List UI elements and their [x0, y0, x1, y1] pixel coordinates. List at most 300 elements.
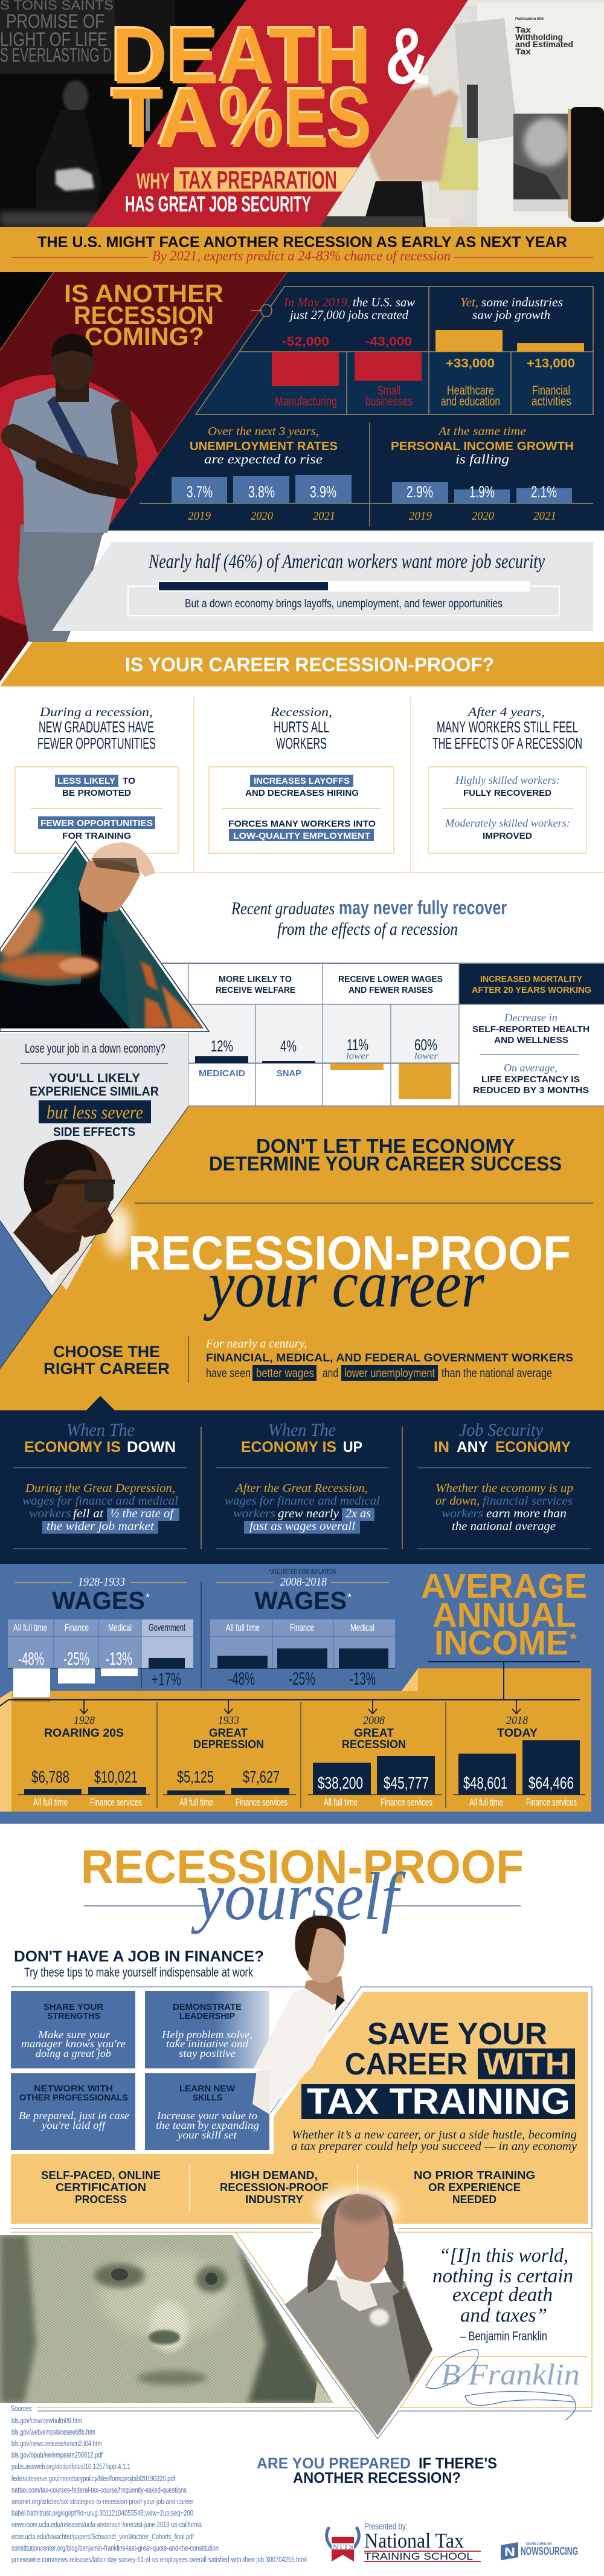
card: demonstrate leadership: DEMONSTRATE: [173, 2002, 242, 2012]
photo: young man in white shirt: [252, 1916, 349, 2115]
benefit: self-paced: [41, 2169, 161, 2206]
column: hurts all workers: [209, 705, 394, 853]
mortality cell: [472, 1012, 590, 1096]
column: when the economy is up: grew nearly: [278, 1507, 339, 1520]
chart: wages 1928-1933: -13%: [106, 1649, 132, 1669]
sources list: constitutioncenter.org/blog/benjamin-franklins-last-great-quote-and-the-constitution: [11, 2543, 219, 2552]
document title on tax publication: Publication 505: [515, 18, 544, 21]
logo: NowSourcing: N: [504, 2546, 515, 2559]
subtitle: why tax preparation has great job security: TAX PREPARATION: [179, 166, 337, 194]
title: DEATH & TAXES: TA: [112, 72, 219, 165]
panel: jobs created in May 2019: [196, 286, 593, 415]
header cells: [216, 974, 591, 995]
column: roaring 20s: [18, 1714, 150, 1808]
hero: red diagonal band: [86, 0, 468, 227]
text: save your career with tax training: Whether it’s a new career, or just a side hustle, becoming: [292, 2128, 577, 2142]
column: new graduates: [15, 705, 178, 853]
column: hurts all workers: WORKERS: [276, 734, 327, 752]
bar chart: personal income growth: 2.1%: [531, 483, 557, 501]
chart: wages 1928-1933: *: [146, 1592, 150, 1604]
photo: engraving of Franklin on banknote: [0, 2235, 338, 2404]
column: great recession: [308, 1714, 442, 1808]
card: learn new skills: SKILLS: [193, 2093, 222, 2103]
column: new graduates: LESS LIKELY: [57, 776, 115, 786]
quote: Benjamin Franklin: [432, 2245, 573, 2343]
text: choose the right career: than the national average: [442, 1367, 552, 1380]
mortality cell: Decrease in: [504, 1012, 557, 1024]
header cells: INCREASED MORTALITY: [480, 974, 582, 984]
logo: National Tax Training School: TRAINING SCHOOL: [364, 2551, 473, 2562]
title: DEATH & TAXES: &: [385, 11, 429, 100]
column: great recession: RECESSION: [342, 1738, 406, 1751]
column: today: [453, 1714, 585, 1808]
heading: is another recession coming: COMING?: [85, 322, 204, 350]
text: job growth intro: Yet,: [460, 295, 478, 309]
bar chart: welfare and wages: lower: [346, 1051, 369, 1061]
text: job losses intro: In May 2019,: [283, 295, 350, 309]
heading: recession-proof yourself: RECESSION-PROOF: [81, 1840, 524, 1893]
column: great recession: $45,777: [384, 1774, 429, 1792]
mortality cell: On average,: [504, 1062, 557, 1074]
mortality cell: LIFE EXPECTANCY IS: [481, 1074, 580, 1085]
chart: wages 2008-2018: [210, 1575, 395, 1689]
column: job security in any economy: [434, 1420, 573, 1533]
closing question: [257, 2455, 497, 2487]
tips cards: [11, 1991, 269, 2150]
table: long-term effects: [162, 963, 604, 1106]
column: roaring 20s: All full time: [33, 1796, 68, 1808]
heading: recession-proof your career: your career: [203, 1247, 485, 1321]
text: choose the right career: lower unemployment: [344, 1367, 435, 1380]
chart: wages 1928-1933: 1928-1933: [78, 1575, 125, 1589]
column: when the economy is down: workers: [29, 1507, 71, 1520]
chart: wages 2008-2018: -25%: [289, 1669, 315, 1689]
chart: wages 2008-2018: All full time: [226, 1622, 260, 1633]
title: DEATH & TAXES: [112, 11, 429, 165]
column: after four years: FULLY RECOVERED: [463, 788, 551, 798]
document title on tax publication: [515, 18, 573, 56]
column: roaring 20s: Finance services: [90, 1796, 142, 1808]
text: unemployment heading: UNEMPLOYMENT RATES: [190, 440, 338, 453]
column: roaring 20s: $10,021: [94, 1767, 138, 1786]
heading: don't let the economy determine your career success: DON'T LET THE ECONOMY: [256, 1135, 515, 1157]
column: when the economy is down: When The: [66, 1420, 135, 1440]
header cells: MORE LIKELY TO: [219, 974, 292, 984]
chart: wages 2008-2018: Finance: [290, 1622, 314, 1633]
document title on tax publication: Withholding: [515, 32, 563, 42]
benefit: no prior training: [414, 2169, 535, 2206]
mortality cell: REDUCED BY 3 MONTHS: [473, 1085, 589, 1096]
column: when the economy is down: ECONOMY IS: [24, 1439, 121, 1456]
heading: is another recession coming: RECESSION: [74, 301, 214, 329]
sources list: bls.gov/web/empsit/ceseeb8b.htm: [11, 2427, 95, 2436]
column: when the economy is up: fast as wages overall: [249, 1520, 355, 1533]
heading band: is your career recession-proof: [0, 642, 604, 686]
sources list: nattax.com/tax-courses-federal-tax-course/frequently-asked-questions: [11, 2485, 187, 2494]
column: when the economy is down: [22, 1420, 179, 1534]
column: when the economy is down: ½ the rate of: [110, 1507, 175, 1520]
subtitle: why tax preparation has great job security: WHY: [137, 169, 170, 193]
column: job security in any economy: IN: [434, 1439, 449, 1456]
bar chart: welfare and wages: [195, 1036, 451, 1099]
text: choose the right career: FINANCIAL, MEDICAL, AND FEDERAL GOVERNMENT WORKERS: [206, 1352, 573, 1364]
text: income growth heading: PERSONAL INCOME GROWTH: [391, 440, 574, 453]
card: share your strengths: manager knows you're: [21, 2038, 126, 2050]
chart: wages 1928-1933: All full time: [13, 1622, 47, 1633]
bar chart: personal income growth: 2020: [472, 509, 494, 523]
panel: save your career background: [11, 1987, 592, 2229]
sources list: babel.hathitrust.org/cgi/pt?id=uiug.30112104053548;view=2up;seq=200: [11, 2508, 193, 2517]
text: income growth heading: At the same time: [437, 425, 526, 438]
section background: is another recession coming: [0, 272, 604, 682]
column: hurts all workers: LOW-QUALITY EMPLOYMENT: [233, 831, 370, 841]
bar chart: unemployment rates: [172, 475, 352, 523]
heading: recession-proof yourself: yourself: [191, 1859, 406, 1934]
card: share your strengths: STRENGTHS: [47, 2011, 100, 2021]
card: learn new skills: [145, 2073, 269, 2150]
chart: wages 1928-1933: [8, 1575, 193, 1690]
bar chart: welfare and wages: SNAP: [277, 1068, 301, 1079]
column: today: All full time: [469, 1796, 503, 1808]
column: hurts all workers: HURTS ALL: [274, 718, 329, 736]
bar chart: welfare and wages: MEDICAID: [199, 1068, 245, 1079]
chart: wages 1928-1933: -25%: [63, 1649, 89, 1669]
sources list: newsroom.ucla.edu/releases/ucla-anderson-forecast-june-2019-us-california: [11, 2520, 202, 2529]
heading: is another recession coming: IS ANOTHER: [64, 279, 223, 308]
heading: is another recession coming: [64, 279, 223, 350]
card: learn new skills: the team by expanding: [156, 2119, 259, 2131]
text: save your career with tax training: [291, 2016, 577, 2153]
column: job security in any economy: earn more than: [486, 1507, 567, 1520]
column: roaring 20s: 1928: [74, 1714, 95, 1727]
bar chart: jobs by industry: activities: [532, 395, 571, 408]
text: save your career with tax training: CAREER: [345, 2047, 467, 2081]
card: network with other professionals: OTHER PROFESSIONALS: [19, 2093, 128, 2103]
column: when the economy is down: the wider job market: [47, 1520, 154, 1533]
benefit: self-paced: CERTIFICATION: [56, 2181, 146, 2193]
column: when the economy is up: [225, 1420, 380, 1534]
text: choose the right career: better wages: [256, 1367, 314, 1380]
text: don't have a job in finance: Try these tips to make yourself indispensable at work: [24, 1966, 253, 1980]
bar chart: personal income growth: 1.9%: [469, 483, 495, 501]
timeline arrows: [80, 1700, 521, 1714]
text: save your career with tax training: SAVE YOUR: [367, 2016, 547, 2051]
text: save your career with tax training: a tax preparer could help you succeed — in any economy: [291, 2140, 577, 2153]
bar chart: jobs by industry: +33,000: [446, 357, 495, 370]
card: share your strengths: SHARE YOUR: [43, 2002, 103, 2012]
benefit: self-paced: SELF-PACED, ONLINE: [41, 2169, 161, 2181]
text: choose the right career: [43, 1336, 573, 1383]
sources list: bls.gov/news.release/union2.t04.htm: [11, 2439, 102, 2448]
bar chart: unemployment rates: 3.7%: [187, 483, 213, 501]
heading: recession-proof yourself: [81, 1840, 524, 1934]
benefits row: [41, 2165, 535, 2213]
panel: lose your job in a down economy: YOU'LL LIKELY: [49, 1071, 140, 1085]
panel: average income timeline: [0, 1662, 591, 1812]
hero: right photograph of tax documents: [302, 0, 604, 227]
card: demonstrate leadership: Help problem solve,: [161, 2029, 252, 2041]
column: new graduates: BE PROMOTED: [62, 788, 131, 798]
header cells: AFTER 20 YEARS WORKING: [472, 985, 591, 995]
icon: NTTS laurel and flag: NTTS: [332, 2544, 353, 2551]
benefit: self-paced: PROCESS: [75, 2193, 127, 2206]
text: choose the right career: and: [323, 1367, 338, 1380]
card: network with other professionals: you're laid off: [40, 2119, 107, 2131]
text: recent graduates may never fully recover: from the effects of a recession: [277, 919, 458, 939]
card: share your strengths: Make sure your: [37, 2029, 111, 2041]
column: after four years: Moderately skilled workers:: [445, 817, 570, 829]
column: today: $48,601: [463, 1774, 507, 1792]
column: after four years: After 4 years,: [467, 705, 545, 719]
photo: young man in cap inside triangle: [0, 840, 209, 1033]
benefit: high demand: HIGH DEMAND,: [230, 2169, 318, 2181]
sources list: amanet.org/articles/six-strategies-to-recession-proof-your-job-and-career: [11, 2497, 193, 2506]
bar chart: jobs by industry: +13,000: [527, 357, 575, 370]
logo: National Tax Training School: [327, 2522, 481, 2562]
bar chart: personal income growth: 2021: [533, 509, 556, 523]
column: job security in any economy: Whether the economy is up: [435, 1482, 573, 1495]
mortality cell: AND WELLNESS: [494, 1035, 568, 1045]
column: great recession: $38,200: [318, 1774, 363, 1792]
column: great depression: GREAT: [209, 1727, 248, 1740]
benefit: no prior training: NO PRIOR TRAINING: [414, 2169, 535, 2181]
chart: wages 1928-1933: -48%: [18, 1649, 44, 1669]
chart: wages 2008-2018: -48%: [228, 1669, 255, 1689]
heading: don't let the economy determine your career success: [209, 1135, 562, 1175]
heading: recession-proof your career: RECESSION-PROOF: [128, 1226, 571, 1280]
title: DEATH & TAXES: DEATH: [112, 11, 371, 100]
bar chart: jobs by industry: Small: [378, 384, 400, 398]
card: share your strengths: [11, 1991, 135, 2068]
chart: wages 2008-2018: WAGES: [254, 1586, 347, 1615]
logo: National Tax Training School: Presented by:: [364, 2522, 408, 2532]
panel: lose your job in a down economy: Lose your job in a down economy?: [25, 1042, 165, 1056]
column: today: Finance services: [526, 1796, 577, 1808]
mortality cell: SELF-REPORTED HEALTH: [472, 1024, 590, 1035]
column: new graduates: During a recession,: [39, 705, 153, 719]
chart: wages 1928-1933: WAGES: [52, 1586, 145, 1615]
heading: average annual income: [421, 1567, 587, 1662]
card: demonstrate leadership: LEADERSHIP: [179, 2011, 235, 2021]
panel: navy economy comparison: [0, 1396, 604, 1564]
column: when the economy is down: During the Great Depression,: [25, 1482, 175, 1495]
subtitle: why tax preparation has great job security: HAS GREAT JOB SECURITY: [125, 192, 311, 216]
icon: NTTS laurel and flag: [327, 2527, 359, 2561]
column: when the economy is up: wages for finance and medical: [225, 1494, 380, 1508]
text: unemployment heading: Over the next 3 years,: [208, 425, 319, 438]
panel: job security statistic: [52, 542, 593, 631]
column: job security in any economy: Job Security: [459, 1420, 544, 1440]
bar chart: jobs by industry: businesses: [365, 395, 413, 408]
quote: Benjamin Franklin: “[I]n this world,: [439, 2245, 568, 2267]
column: job security in any economy: workers: [442, 1507, 483, 1520]
bar chart: jobs by industry: -52,000: [282, 335, 329, 349]
card: network with other professionals: [11, 2073, 135, 2150]
column: job security in any economy: financial services: [483, 1494, 573, 1508]
band: recession forecast: By 2021, experts predict a 24-83% chance of recession: [152, 248, 451, 263]
column: new graduates: TO: [123, 776, 135, 786]
chart: wages 1928-1933: +17%: [152, 1670, 181, 1690]
text: don't have a job in finance: [14, 1948, 264, 1980]
text: choose the right career: have seen: [206, 1367, 251, 1380]
closing question: ANOTHER RECESSION?: [293, 2470, 461, 2487]
bar chart: welfare and wages: 11%: [347, 1036, 368, 1054]
panel: blue wages and income section: *ADJUSTED FOR INFLATION: [269, 1567, 336, 1576]
quote: Benjamin Franklin: and taxes”: [460, 2305, 547, 2326]
column: great recession: GREAT: [354, 1727, 394, 1740]
card: learn new skills: LEARN NEW: [179, 2084, 236, 2094]
column: great depression: $7,627: [243, 1767, 280, 1786]
sources list: prnewswire.com/news-releases/labor-day-survey-51-of-us-employees-overall-satisfied-with-their-job-300704255.html: [11, 2555, 307, 2564]
quote: Benjamin Franklin: – Benjamin Franklin: [460, 2329, 547, 2343]
column: today: TODAY: [497, 1727, 538, 1740]
bar chart: welfare and wages: lower: [414, 1051, 438, 1061]
column: great depression: [163, 1714, 296, 1808]
document title on tax publication: Tax: [515, 47, 531, 56]
column: when the economy is up: workers: [233, 1507, 275, 1520]
bar chart: jobs by industry: and education: [441, 395, 500, 408]
column: job security in any economy: or down,: [435, 1494, 480, 1508]
benefit: high demand: RECESSION-PROOF: [220, 2181, 329, 2193]
bar chart: jobs by industry: [272, 330, 584, 408]
header cells: RECEIVE WELFARE: [216, 985, 295, 995]
column: great depression: $5,125: [177, 1767, 214, 1786]
column: great recession: Finance services: [381, 1796, 432, 1808]
card: share your strengths: doing a great job: [36, 2047, 111, 2059]
quote panel frame: [11, 2232, 592, 2407]
column: hurts all workers: FORCES MANY WORKERS INTO: [228, 819, 376, 829]
quote: Benjamin Franklin: except death: [452, 2284, 553, 2306]
hero: left photograph of cloaked figure: [0, 0, 254, 227]
bar chart: jobs by industry: Financial: [532, 384, 570, 398]
bar chart: unemployment rates: 3.8%: [248, 483, 275, 501]
text: unemployment heading: are expected to rise: [204, 451, 323, 466]
column: today: 2018: [506, 1714, 528, 1727]
column: roaring 20s: ROARING 20S: [44, 1727, 124, 1740]
closing question: ARE YOU PREPARED: [257, 2455, 411, 2472]
sources list: [11, 2404, 307, 2564]
column: great depression: DEPRESSION: [193, 1738, 264, 1751]
band: recession forecast: [0, 227, 604, 272]
benefit: high demand: INDUSTRY: [245, 2193, 303, 2206]
benefit: no prior training: NEEDED: [452, 2193, 496, 2206]
text: job losses intro: [283, 295, 415, 322]
column: job security in any economy: the national average: [452, 1520, 556, 1533]
carved wall inscription: S EVERLASTING D: [0, 44, 112, 66]
card: demonstrate leadership: [145, 1991, 269, 2068]
signature: B. Franklin: [426, 2349, 580, 2420]
text: income growth heading: [391, 425, 574, 466]
card: network with other professionals: Be prepared, just in case: [19, 2110, 129, 2122]
sources list: pubs.aeaweb.org/doi/pdfplus/10.1257/app.4.1.1: [11, 2462, 130, 2471]
panel: lose your job in a down economy: [0, 1033, 188, 1369]
chart: wages 2008-2018: -13%: [350, 1669, 376, 1689]
heading: average annual income: INCOME: [434, 1624, 568, 1662]
column: when the economy is down: wages for finance and medical: [22, 1494, 178, 1508]
text: job growth intro: some industries: [481, 295, 563, 309]
bar chart: jobs by industry: -43,000: [365, 335, 412, 349]
column: hurts all workers: AND DECREASES HIRING: [245, 788, 359, 798]
card: learn new skills: your skill set: [176, 2129, 237, 2141]
column: when the economy is down: fell at: [73, 1507, 103, 1520]
bar chart: unemployment rates: 2021: [313, 509, 335, 523]
column: when the economy is down: DOWN: [127, 1439, 176, 1456]
column: hurts all workers: INCREASES LAYOFFS: [254, 776, 350, 786]
text: choose the right career: CHOOSE THE: [53, 1343, 160, 1361]
text: recent graduates may never fully recover: may never fully recover: [339, 897, 507, 918]
signature: B. Franklin: B Franklin: [441, 2357, 580, 2391]
document title on tax publication: Tax: [515, 25, 531, 34]
column: after four years: [428, 705, 586, 853]
column: after four years: IMPROVED: [483, 831, 532, 841]
title: DEATH & TAXES: %: [220, 72, 284, 165]
bar chart: welfare and wages: 60%: [414, 1036, 437, 1054]
text: job losses intro: the U.S. saw: [353, 295, 415, 309]
panel: lose your job in a down economy: EXPERIENCE SIMILAR: [30, 1085, 159, 1099]
panel: gold career section: [0, 1106, 604, 1410]
carved wall inscription: [0, 0, 114, 66]
card: learn new skills: Increase your value to: [156, 2110, 257, 2122]
column: new graduates: FOR TRAINING: [62, 831, 131, 841]
header cells: RECEIVE LOWER WAGES: [338, 974, 443, 984]
band: recession forecast: THE U.S. MIGHT FACE ANOTHER RECESSION AS EARLY AS NEXT YEAR: [37, 234, 567, 251]
sources list: Sources:: [11, 2404, 33, 2413]
bar chart: personal income growth: [392, 482, 572, 523]
bar chart: unemployment rates: 2019: [188, 509, 211, 523]
column: job security in any economy: ANY: [457, 1439, 488, 1456]
text: job losses intro: just 27,000 jobs created: [288, 308, 408, 322]
text: save your career with tax training: WITH: [483, 2047, 570, 2081]
panel: job security statistic: But a down economy brings layoffs, unemployment, and fewer opportunities: [185, 598, 503, 610]
panel: blue wages and income section: [0, 1564, 604, 1824]
carved wall inscription: LIGHT OF LIFE: [0, 28, 108, 50]
text: job growth intro: [460, 295, 563, 322]
column: when the economy is up: UP: [343, 1439, 362, 1456]
column: great recession: 2008: [363, 1714, 385, 1727]
photo: man with crossed arms: [5, 334, 131, 642]
benefit: high demand: [220, 2169, 329, 2206]
photo: man with sunglasses: [12, 1140, 131, 1290]
column: hurts all workers: Recession,: [270, 705, 332, 719]
chart: wages 1928-1933: Government: [149, 1622, 185, 1633]
chart: wages 2008-2018: 2008-2018: [280, 1575, 327, 1589]
bar chart: jobs by industry: Healthcare: [447, 384, 494, 398]
text: recent graduates may never fully recover: Recent graduates: [231, 899, 335, 918]
logo: NowSourcing: NOWSOURCING: [521, 2545, 578, 2557]
text: choose the right career: RIGHT CAREER: [43, 1360, 170, 1378]
column: great depression: All full time: [179, 1796, 213, 1808]
bar chart: unemployment rates: 2020: [251, 509, 273, 523]
document title on tax publication: and Estimated: [515, 39, 573, 49]
column: when the economy is up: When The: [268, 1420, 336, 1440]
panel: lose your job in a down economy: but less severe: [47, 1102, 143, 1123]
column: when the economy is up: After the Great Recession,: [234, 1482, 368, 1495]
text: job growth intro: saw job growth: [472, 308, 550, 322]
bar chart: jobs by industry: Manufacturing: [275, 395, 337, 408]
chart: wages 2008-2018: Medical: [350, 1622, 374, 1633]
text: don't have a job in finance: DON'T HAVE A JOB IN FINANCE?: [14, 1948, 264, 1965]
column: after four years: Highly skilled workers:: [455, 774, 560, 786]
panel: lose your job in a down economy: SIDE EFFECTS: [53, 1125, 135, 1139]
column: new graduates: NEW GRADUATES HAVE: [39, 718, 154, 736]
panel: unemployment rates and income growth: [140, 422, 593, 526]
column: when the economy is up: 2x as: [345, 1507, 371, 1520]
column: great depression: Finance services: [236, 1796, 288, 1808]
bar chart: welfare and wages: 4%: [280, 1037, 297, 1055]
card: demonstrate leadership: take initiative and: [166, 2038, 249, 2050]
bar chart: personal income growth: 2019: [409, 509, 432, 523]
column: new graduates: FEWER OPPORTUNITIES: [40, 818, 153, 828]
